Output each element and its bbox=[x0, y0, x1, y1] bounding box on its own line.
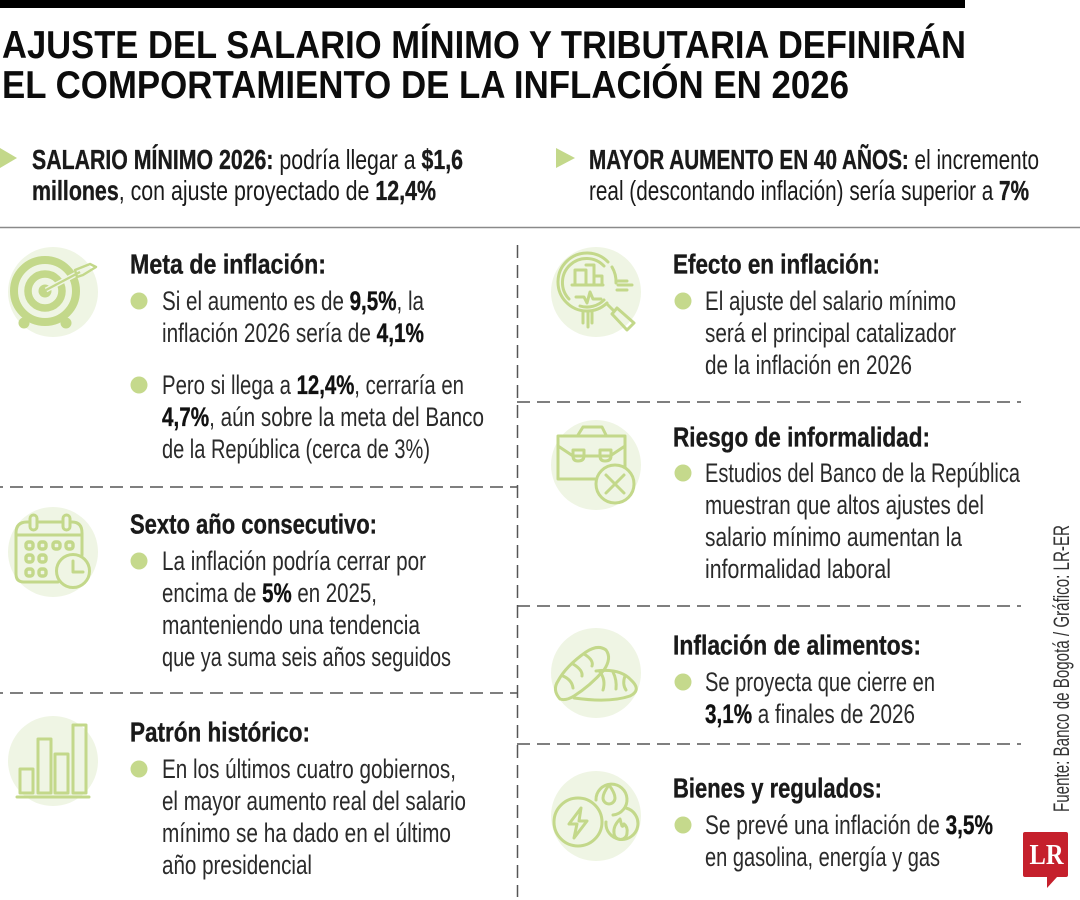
bullet point bbox=[674, 810, 993, 872]
summary: mayor aumento en 40 años: MAYOR AUMENTO EN 40 AÑOS: el incremento bbox=[589, 144, 1039, 175]
bullet point bbox=[130, 286, 425, 348]
icon: briefcase with cross bbox=[551, 420, 641, 510]
bullet point: de la inflación en 2026 bbox=[705, 350, 912, 380]
panel: bienes y regulados bbox=[551, 771, 993, 872]
bullet point: En los últimos cuatro gobiernos, bbox=[162, 754, 456, 784]
bullet point: inflación 2026 sería de 4,1% bbox=[162, 318, 424, 348]
bullet point bbox=[130, 546, 451, 672]
panel: patrón histórico bbox=[8, 716, 466, 880]
bullet point: Pero si llega a 12,4%, cerraría en bbox=[162, 370, 464, 400]
bullet point: el mayor aumento real del salario bbox=[162, 786, 466, 816]
title bbox=[2, 23, 966, 107]
bullet point: encima de 5% en 2025, bbox=[162, 578, 377, 608]
bullet point: será el principal catalizador bbox=[705, 318, 956, 348]
panel: efecto en inflación bbox=[551, 247, 956, 380]
arrow marker left bbox=[0, 148, 17, 168]
logo: LR bbox=[1023, 832, 1068, 888]
bullet point bbox=[674, 286, 956, 380]
bullet point: Se prevé una inflación de 3,5% bbox=[705, 810, 993, 840]
icon: bread bbox=[551, 628, 641, 718]
bullet point bbox=[674, 458, 1021, 584]
icon: calendar bbox=[8, 507, 98, 597]
heading: Riesgo de informalidad: bbox=[673, 422, 930, 452]
top black bar bbox=[0, 0, 965, 8]
bullet point bbox=[674, 667, 935, 729]
bullet point: 3,1% a finales de 2026 bbox=[705, 699, 915, 729]
heading: Inflación de alimentos: bbox=[673, 630, 921, 660]
panel: sexto año consecutivo bbox=[8, 507, 451, 672]
icon: bar chart bbox=[8, 716, 98, 806]
bullet point: que ya suma seis años seguidos bbox=[162, 642, 451, 672]
bullet point: Se proyecta que cierre en bbox=[705, 667, 935, 697]
summary: salario mínimo 2026 bbox=[0, 144, 463, 206]
logo: LR: LR bbox=[1030, 839, 1064, 871]
heading: Efecto en inflación: bbox=[673, 248, 880, 280]
bullet point: muestran que altos ajustes del bbox=[705, 490, 984, 520]
arrow marker right bbox=[556, 148, 575, 168]
bullet point: informalidad laboral bbox=[705, 554, 891, 584]
bullet point bbox=[130, 754, 466, 880]
summary: salario mínimo 2026: millones, con ajuste proyectado de 12,4% bbox=[32, 175, 436, 206]
bullet point: mínimo se ha dado en el último bbox=[162, 818, 451, 848]
summary: salario mínimo 2026: SALARIO MÍNIMO 2026: podría llegar a $1,6 bbox=[32, 144, 463, 175]
heading: Meta de inflación: bbox=[130, 248, 326, 280]
bullet point: La inflación podría cerrar por bbox=[162, 546, 426, 576]
bullet point: de la República (cerca de 3%) bbox=[162, 434, 430, 464]
source credit: Fuente: Banco de Bogotá / Gráfico: LR-ER bbox=[1049, 525, 1074, 812]
bullet point bbox=[130, 370, 484, 464]
icon: target bbox=[8, 247, 98, 337]
panel: meta de inflación bbox=[8, 247, 484, 464]
title: AJUSTE DEL SALARIO MÍNIMO Y TRIBUTARIA DEFINIRÁN bbox=[2, 23, 966, 67]
panel: inflación de alimentos bbox=[551, 628, 935, 729]
bullet point: El ajuste del salario mínimo bbox=[705, 286, 956, 316]
bullet point: año presidencial bbox=[162, 850, 312, 880]
heading: Sexto año consecutivo: bbox=[130, 508, 377, 540]
heading: Patrón histórico: bbox=[130, 716, 310, 748]
heading: Bienes y regulados: bbox=[673, 772, 882, 804]
bullet point: Si el aumento es de 9,5%, la bbox=[162, 286, 425, 316]
icon: magnifier with chart bbox=[551, 247, 641, 337]
panel: riesgo de informalidad bbox=[551, 420, 1021, 584]
summary: mayor aumento en 40 años bbox=[556, 144, 1039, 206]
bullet point: salario mínimo aumentan la bbox=[705, 522, 963, 552]
bullet point: en gasolina, energía y gas bbox=[705, 842, 940, 872]
bullet point: 4,7%, aún sobre la meta del Banco bbox=[162, 402, 484, 432]
title: EL COMPORTAMIENTO DE LA INFLACIÓN EN 2026 bbox=[2, 63, 849, 107]
icon: energy, water and gas bbox=[551, 771, 641, 861]
bullet point: manteniendo una tendencia bbox=[162, 610, 421, 640]
